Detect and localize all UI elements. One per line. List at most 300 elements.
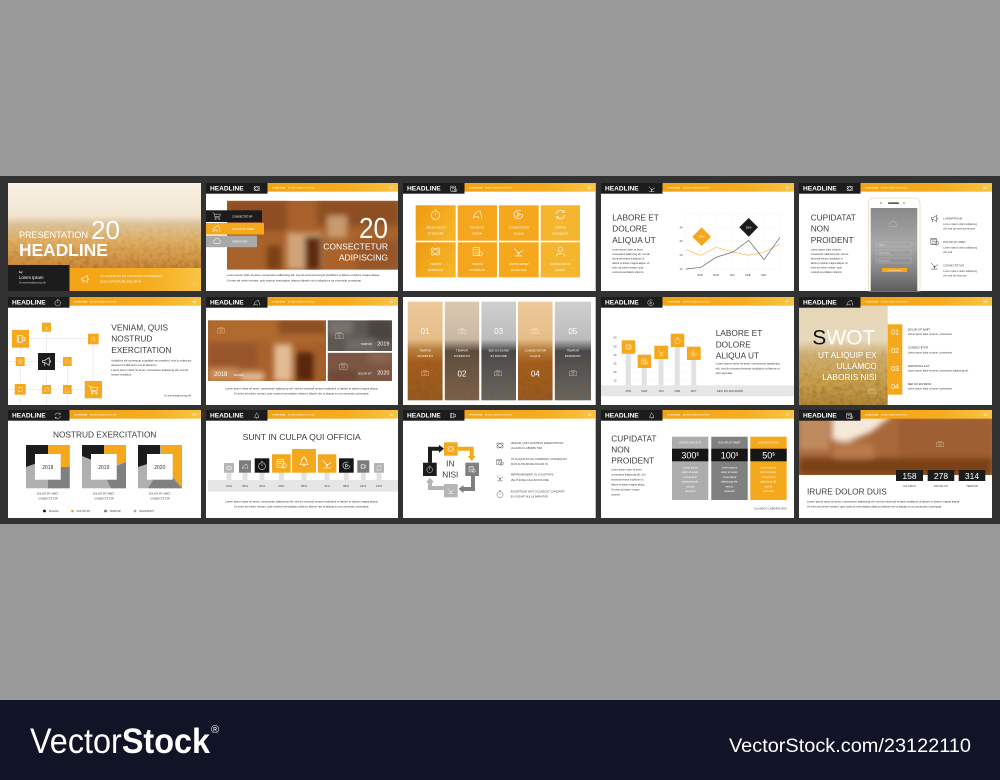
bar chart: FEB xyxy=(675,389,680,393)
slide 1: cover: › xyxy=(193,282,195,288)
slide 15: stats over photo xyxy=(799,410,992,518)
band caption: SEO DO EIUSMOD xyxy=(717,389,744,393)
numbered strip: 04 xyxy=(891,382,899,391)
header: UT WISI ENIM xyxy=(865,415,878,417)
text block: Lorem ipsum dolor sit amet, consectetur adipiscing elit, sed do eiusmod tempor incididunt ut labore et dolore magna aliqua. xyxy=(225,388,379,391)
title: LABORE ET xyxy=(716,328,762,338)
tile labels: DOLOR SIT xyxy=(470,226,485,230)
stat: 278: DOLOR SIT xyxy=(934,484,949,488)
tile labels: ALIQUA xyxy=(514,232,524,236)
price column 2: sed do xyxy=(725,484,734,488)
phone: Create account xyxy=(888,269,902,272)
header: 05 xyxy=(192,300,196,304)
strip labels: 01 xyxy=(421,327,430,336)
header: 13 xyxy=(983,413,987,417)
strip labels: 03 xyxy=(494,327,504,336)
bar chart: 20 xyxy=(614,370,617,374)
tile labels: ET DOLORE xyxy=(511,268,527,272)
header: HEADLINE xyxy=(407,412,441,420)
tile labels xyxy=(426,226,571,272)
icon bars: 55% xyxy=(301,484,307,488)
slide 6: network diagram: EXERCITATION xyxy=(111,345,171,355)
feature list: Lorem ipsum dolor adipiscing xyxy=(943,222,978,226)
legend: INCIDIDUNT xyxy=(139,509,154,513)
text block: nostrud xyxy=(611,494,620,497)
feature list: DOLOR SIT AMET xyxy=(943,240,966,244)
header: UT WISI ENIM xyxy=(272,188,285,190)
item list: EU FUGIAT NULLA PARIATUR xyxy=(511,494,548,498)
list: ADIPISCING ELIT xyxy=(908,364,930,368)
bar chart: 50 xyxy=(614,344,617,348)
header: HEADLINE xyxy=(605,186,639,192)
header: HEADLINE xyxy=(12,300,46,306)
stat: 314: 314 xyxy=(965,471,979,481)
header: AD MINIM VENIAM QUIS NOSTRUD xyxy=(288,187,315,190)
header: HEADLINE xyxy=(605,412,639,420)
item list: DUIS AUTE IRURE DOLOR IN xyxy=(511,462,548,466)
feature list: CONSECTETUR xyxy=(943,264,964,268)
text block xyxy=(612,248,650,274)
footer id: VectorStock.com/23122110 xyxy=(729,735,971,757)
menu: CONSECTETUR xyxy=(232,214,253,218)
chart captions: CONSECTETUR xyxy=(150,497,170,501)
line chart: 10 xyxy=(680,267,683,271)
price column 1: eiusmod xyxy=(685,489,696,493)
list xyxy=(908,327,969,391)
stat: 158: ULLAMCO xyxy=(903,484,916,488)
icon bars: 38% xyxy=(343,484,349,488)
tile labels: ET DOLORE xyxy=(428,232,444,236)
menu: ADIPISCING xyxy=(232,240,248,244)
price column 1: sed do xyxy=(686,484,695,488)
header: AD MINIM VENIAM QUIS NOSTRUD xyxy=(881,414,908,417)
numbered strip: 02 xyxy=(891,346,899,355)
text block: Lorem ipsum dolor sit amet, consectetur adipiscing elit, sed do xyxy=(111,369,189,372)
slide 14: pricing: PROIDENT xyxy=(611,456,654,466)
strip labels: INCIDIDUNT xyxy=(565,354,581,358)
stat: 314 xyxy=(959,470,985,488)
feature list: LOREM IPSUM xyxy=(943,216,963,220)
header: HEADLINE xyxy=(803,412,837,420)
price column 2 xyxy=(711,437,748,500)
strip labels: TEMPOR xyxy=(419,348,431,352)
slide 11: yearly charts xyxy=(8,410,201,518)
bar chart: JAN xyxy=(658,389,664,393)
tile labels: ALIQUA xyxy=(555,268,565,272)
text block xyxy=(111,360,192,376)
tile labels: INCIDIDUNT xyxy=(553,232,568,236)
photo: 2020 xyxy=(328,352,392,381)
header: AD MINIM VENIAM QUIS NOSTRUD xyxy=(288,414,315,417)
title: SUNT IN CULPA QUI OFFICIA xyxy=(243,432,361,442)
header: AD MINIM VENIAM QUIS NOSTRUD xyxy=(881,301,908,304)
line chart: 40 xyxy=(680,225,683,229)
slide 14: pricing xyxy=(601,410,794,518)
phone: User name xyxy=(879,251,890,254)
header: AD MINIM VENIAM QUIS NOSTRUD xyxy=(90,414,117,417)
line chart: MAR xyxy=(713,273,719,277)
price column 3: eiusmod xyxy=(763,489,774,493)
slide 13: cycle diagram xyxy=(403,410,596,518)
item list: UT ALIQUIP EX EA COMMODO CONSEQUAT xyxy=(511,457,567,461)
strip labels: CONSECTETUR xyxy=(525,348,546,352)
price column 3: $ xyxy=(772,451,775,456)
strip labels xyxy=(417,327,581,378)
text block xyxy=(611,469,646,497)
legend: MAGNA xyxy=(49,509,59,513)
slide 1: cover: by xyxy=(19,270,23,274)
tile labels: MAGNA xyxy=(472,232,482,236)
header: HEADLINE xyxy=(210,300,244,306)
slide 5: phone mockup: PROIDENT xyxy=(811,235,854,245)
text block: Lorem ipsum dolor sit amet, xyxy=(611,469,642,472)
band xyxy=(208,480,398,492)
menu: DOLOR SIT AMET xyxy=(232,227,255,231)
slide 6: network diagram xyxy=(8,297,201,405)
strip labels: TEMPOR xyxy=(456,348,468,352)
legend: DOLOR SIT xyxy=(76,509,91,513)
icon bars: 47% xyxy=(324,484,330,488)
slide 4: line chart xyxy=(601,183,794,291)
slide 4: line chart: ALIQUA UT xyxy=(612,235,656,245)
slide 4: line chart: DOLORE xyxy=(612,224,648,234)
numbered strip xyxy=(888,324,902,395)
header: UT WISI ENIM xyxy=(667,188,680,190)
tile labels: SED DO EIUSM xyxy=(426,226,446,230)
header: HEADLINE xyxy=(210,412,244,420)
header xyxy=(799,183,992,194)
dark slide band xyxy=(0,176,1000,524)
text block: Lorem ipsum dolor sit amet, consectetur adipiscing elit, sed do eiusmod tempor incididunt ut labore et dolore magna aliqua. xyxy=(227,274,380,277)
header: AD MINIM VENIAM QUIS NOSTRUD xyxy=(881,187,908,190)
numbered strip: 01 xyxy=(891,328,899,337)
chart captions: CONSECTETUR xyxy=(94,497,114,501)
tile labels: SED DO EIUSM xyxy=(509,262,529,266)
slide 9: bar chart: DOLORE xyxy=(716,339,751,349)
list: Lorem ipsum dolor sit amet, consectetur xyxy=(908,351,952,354)
line chart: MAY xyxy=(761,273,767,277)
header: UT WISI ENIM xyxy=(667,415,680,417)
text block: labore et dolore magna aliqua. Ut xyxy=(811,262,848,265)
text block: labore et dolore magna aliqua. xyxy=(611,484,645,487)
price column 3: sed do xyxy=(764,484,773,488)
price column 1: Lorem ipsum xyxy=(682,465,699,469)
slide 7: photo collage xyxy=(206,297,398,405)
chart 2020 xyxy=(138,445,182,488)
chart captions: CONSECTETUR xyxy=(38,497,58,501)
item list: REPREHENDERIT IN VOLUPTATE xyxy=(511,473,554,477)
price column 1: 300 xyxy=(681,450,696,460)
header xyxy=(799,297,992,308)
slide 8: photo strips xyxy=(403,297,596,405)
text block: eiusmod tempor incididunt ut xyxy=(811,257,843,260)
slide 7: photo collage: Ut enim ad minim veniam, quis nostrud exercitation ullamco laboris nisi ut aliquip ex ea commodo consequat. xyxy=(234,393,370,396)
photo xyxy=(799,306,888,405)
slide 2: consectetur adipiscing: ADIPISCING xyxy=(339,253,388,263)
photo: main: 2018 xyxy=(214,372,228,378)
header xyxy=(601,297,794,308)
slide 6: network diagram: NOSTRUD xyxy=(111,334,152,344)
header: AD MINIM VENIAM QUIS NOSTRUD xyxy=(90,301,117,304)
price column 1: ADIPISCING ELIT xyxy=(679,440,702,444)
list: SED DO EIUSMOD xyxy=(908,382,931,386)
strip labels: TEMPOR xyxy=(567,348,579,352)
photo: 2019: 2019 xyxy=(377,341,389,347)
slide 5: phone mockup: NON xyxy=(811,224,829,234)
feature list: elit, sed do eiusmod tempor xyxy=(943,226,975,230)
numbered strip: 03 xyxy=(891,364,899,373)
slide 1: cover: UT ALIQUIP EX EA COMMODO CONSEQUAT xyxy=(100,274,163,278)
feature list xyxy=(931,215,978,278)
tile labels: INCIDIDUNT xyxy=(470,268,485,272)
slide 1: cover: 20 xyxy=(91,215,120,245)
text block: dolore magna aliqua. xyxy=(716,372,733,375)
text block: deserunt mollit anim id est laborum. xyxy=(111,364,158,367)
text block: enim ad minim veniam, quis xyxy=(811,266,842,269)
chart 2018 xyxy=(26,445,70,488)
text block: eiusmod tempor incididunt ut xyxy=(612,257,645,260)
slide 9: bar chart xyxy=(601,297,794,405)
line chart xyxy=(680,214,780,277)
header: AD MINIM VENIAM QUIS NOSTRUD xyxy=(288,301,315,304)
strip labels: 04 xyxy=(531,369,540,378)
header: UT WISI ENIM xyxy=(667,302,680,304)
line chart: FEB xyxy=(745,273,751,277)
bar chart xyxy=(614,334,701,393)
bar chart: APR xyxy=(626,389,631,393)
list: DOLOR SIT AMET xyxy=(908,327,931,331)
chart 2019 xyxy=(82,445,126,488)
chart captions: DOLOR SIT AMET, xyxy=(93,491,115,495)
footer logo: ® xyxy=(211,724,219,736)
header: 07 xyxy=(785,300,789,304)
cycle diagram: NISI xyxy=(442,470,458,480)
text block: Lorem ipsum dolor sit amet, consectetur adipiscing elit, sed do eiusmod tempor incididunt ut labore et dolore magna aliqua. xyxy=(225,501,379,504)
bar chart: 60 xyxy=(614,336,617,340)
slide 1: cover: PRESENTATION xyxy=(19,230,88,240)
tile labels: TEMPOR xyxy=(430,262,442,266)
list: Lorem ipsum dolor sit amet, consectetur xyxy=(908,388,952,391)
icon bars: 25% xyxy=(242,484,248,488)
feature list: Lorem ipsum dolor adipiscing xyxy=(943,269,978,273)
title: CUPIDATAT xyxy=(611,434,656,444)
bar chart: MAY xyxy=(691,389,697,393)
header xyxy=(601,410,794,421)
photo: 2019 xyxy=(328,320,392,351)
header: UT WISI ENIM xyxy=(74,415,87,417)
strip labels: INCIDIDUNT xyxy=(454,354,470,358)
slide 1: cover xyxy=(8,183,201,291)
icon bars: 15% xyxy=(376,484,382,488)
tile labels: CONSECTETUR xyxy=(550,262,571,266)
strip labels: INCIDIDUNT xyxy=(417,354,434,358)
slide 1: cover: DUIS AUTE IRURE DOLOR IN xyxy=(100,280,141,284)
price column 1: consectetur xyxy=(683,475,697,479)
feature list: elit, sed xyxy=(943,250,953,254)
header: 01 xyxy=(389,186,393,190)
header: AD MINIM VENIAM QUIS NOSTRUD xyxy=(683,187,710,190)
photo xyxy=(227,200,398,270)
subtitle: LABORIS NISI xyxy=(822,372,877,382)
price column 2: consectetur xyxy=(723,475,737,479)
header: UT WISI ENIM xyxy=(469,415,482,417)
line chart: 20 xyxy=(680,253,683,257)
list: Lorem ipsum dolor sit amet, consectetur adipiscing elit. xyxy=(908,370,969,372)
price column 3 xyxy=(750,437,787,500)
bar chart: 10 xyxy=(614,379,617,383)
price column 2: eiusmod xyxy=(724,489,735,493)
item list: VENIAM, QUIS NOSTRUD EXERCITATION xyxy=(511,441,563,445)
feature list: elit, sed do eiusmod xyxy=(943,274,967,278)
strip labels: 02 xyxy=(458,369,467,378)
header: HEADLINE xyxy=(605,300,639,306)
price column 1: $ xyxy=(696,451,699,456)
text block: Lorem ipsum dolor sit amet, xyxy=(811,248,842,251)
slide 14: pricing: NON xyxy=(611,445,630,455)
slide 15: stats over photo: Ut enim ad minim veniam, quis nostrud exercitation ullamco laboris nisi ut aliquip ex ea commodo consequat. xyxy=(807,506,942,509)
text block: incididunt elit consequat cupidatat non proident, sunt in culpa qui xyxy=(111,360,192,363)
legend: TEMPOR xyxy=(110,509,121,513)
footer band xyxy=(601,385,794,396)
price column 3: consectetur xyxy=(762,475,776,479)
header: 12 xyxy=(785,413,789,417)
bar chart: 30 xyxy=(614,362,617,366)
line chart: APR xyxy=(697,273,703,277)
tile labels: TEMPOR xyxy=(472,262,483,266)
slide 1: cover: HEADLINE xyxy=(19,240,108,260)
slide 2: consectetur adipiscing: 20 xyxy=(359,213,388,245)
photo: main xyxy=(208,320,326,381)
price column 2: $ xyxy=(736,451,739,456)
item list xyxy=(496,441,567,498)
text block: nostrud exercitation ullamco xyxy=(811,271,842,274)
bar chart: 40 xyxy=(614,353,617,357)
text block: Lorem ipsum dolor sit amet, consectetur adipiscing xyxy=(716,363,780,366)
icon bars xyxy=(224,449,384,488)
price column 2: dolor sit amet, xyxy=(721,470,738,474)
item list: ULLAMCO LABORIS NISI xyxy=(511,446,542,450)
chart 2020: 2020 xyxy=(154,465,166,471)
photo strips xyxy=(408,297,592,405)
title: CUPIDATAT xyxy=(811,212,856,222)
text block: nostrud exercitation ullamco xyxy=(612,271,644,274)
slide 2: consectetur adipiscing: CONSECTETUR xyxy=(323,242,388,252)
title: VENIAM, QUIS xyxy=(111,322,168,332)
item list: EXCEPTEUR SINT OCCAECAT CUPIDATAT xyxy=(511,489,565,493)
cycle diagram: IN xyxy=(446,459,454,469)
text block: enim ad minim veniam, quis xyxy=(612,266,644,269)
header xyxy=(601,183,794,194)
price column 1 xyxy=(672,437,708,500)
header: HEADLINE xyxy=(407,186,441,192)
text block xyxy=(716,363,780,375)
stat: 158: 158 xyxy=(902,471,917,481)
footer logo: VectorStock xyxy=(30,722,210,761)
header: AD MINIM VENIAM QUIS NOSTRUD xyxy=(485,187,512,190)
header: HEADLINE xyxy=(803,300,837,306)
header xyxy=(799,410,992,421)
tile labels: CONSECTETUR xyxy=(509,226,529,230)
price column 3: Lorem ipsum xyxy=(761,465,777,469)
slide 2: consectetur adipiscing xyxy=(206,183,399,291)
header: HEADLINE xyxy=(210,186,244,192)
slide 2: consectetur adipiscing: Ut enim ad minim veniam, quis nostrud exercitation ullamco laboris nisi ut aliquip ex ea commodo consequat. xyxy=(227,279,362,282)
chart captions: DOLOR SIT AMET, xyxy=(37,491,59,495)
header xyxy=(206,297,398,308)
text block: eiusmod tempor incididunt ut xyxy=(611,479,644,482)
chart 2018: 2018 xyxy=(42,465,54,471)
slide 10: SWOT xyxy=(799,297,992,405)
slide 9: bar chart: ALIQUA UT xyxy=(716,351,759,361)
tile labels: INCIDIDUNT xyxy=(428,268,444,272)
text block: consectetur adipiscing elit, sed xyxy=(611,474,646,477)
phone xyxy=(868,198,920,291)
header: 10 xyxy=(389,413,393,417)
strip labels: ALIQUA xyxy=(530,354,541,358)
header xyxy=(8,297,201,308)
price column 3: adipiscing elit, xyxy=(760,480,777,484)
feature list: Lorem ipsum dolor adipiscing xyxy=(943,246,978,250)
price column 2: Lorem ipsum xyxy=(722,465,738,469)
slide grid xyxy=(8,183,992,518)
list: CONSECTETUR xyxy=(908,346,928,350)
text block xyxy=(811,248,849,274)
text block: tempor incididunt xyxy=(111,373,132,376)
icon bars: 24% xyxy=(360,484,366,488)
header: UT WISI ENIM xyxy=(469,188,482,190)
subtitle: ULLAMCO xyxy=(837,361,877,371)
title: IRURE DOLOR DUIS xyxy=(807,487,887,497)
price column 2: 100 xyxy=(721,450,736,460)
network diagram xyxy=(8,322,102,405)
icon bars: 34% xyxy=(259,484,265,488)
line chart: 30 xyxy=(680,239,683,243)
price column 3: dolor sit amet, xyxy=(760,470,777,474)
header: UT WISI ENIM xyxy=(74,302,87,304)
stat: 158 xyxy=(896,470,923,488)
SWOT title: SWOT xyxy=(812,326,875,349)
slide 5: phone mockup xyxy=(799,183,992,291)
caption: ULLAMCO LABORIS NISI xyxy=(754,506,787,510)
slide 1: cover: Sr ametvadipiscing elit xyxy=(19,280,46,284)
header: 11 xyxy=(588,413,591,417)
cycle diagram xyxy=(423,442,479,497)
header: UT WISI ENIM xyxy=(272,415,285,417)
strip labels: SED DO EIUSM xyxy=(489,348,510,352)
subtitle xyxy=(818,350,877,382)
footer bar xyxy=(0,700,1000,780)
text block: Lorem ipsum dolor sit amet, xyxy=(612,248,643,251)
header: 04 xyxy=(983,186,987,190)
list: Lorem ipsum dolor sit amet, consectetur xyxy=(908,333,952,336)
line chart: JAN xyxy=(729,273,735,277)
price column 3: CONSECTETUR xyxy=(758,440,779,444)
header xyxy=(403,410,596,421)
header: 08 xyxy=(983,300,987,304)
chart captions: DOLOR SIT AMET, xyxy=(149,491,171,495)
slide 12: percent bars: Ut enim ad minim veniam, quis nostrud exercitation ullamco laboris nisi ut aliquip ex ea commodo consequat. xyxy=(234,506,370,509)
slide 3: orange icon grid xyxy=(403,183,596,291)
tile grid xyxy=(416,205,580,277)
text block: consectetur adipiscing elit, sed do xyxy=(811,253,849,256)
text block: Lorem ipsum dolor sit amet, consectetur adipiscing elit, sed do eiusmod tempor incididunt ut labore et dolore magna aliqua. xyxy=(807,501,960,504)
photo: main: MAGNA xyxy=(234,373,244,377)
stat: 314: TEMPOR xyxy=(966,484,978,488)
header: AD MINIM VENIAM QUIS NOSTRUD xyxy=(485,414,512,417)
text block: elit, sed do eiusmod tempor incididunt ut labore et xyxy=(716,367,780,370)
tile labels: TEMPOR xyxy=(555,226,566,230)
header xyxy=(206,183,398,194)
